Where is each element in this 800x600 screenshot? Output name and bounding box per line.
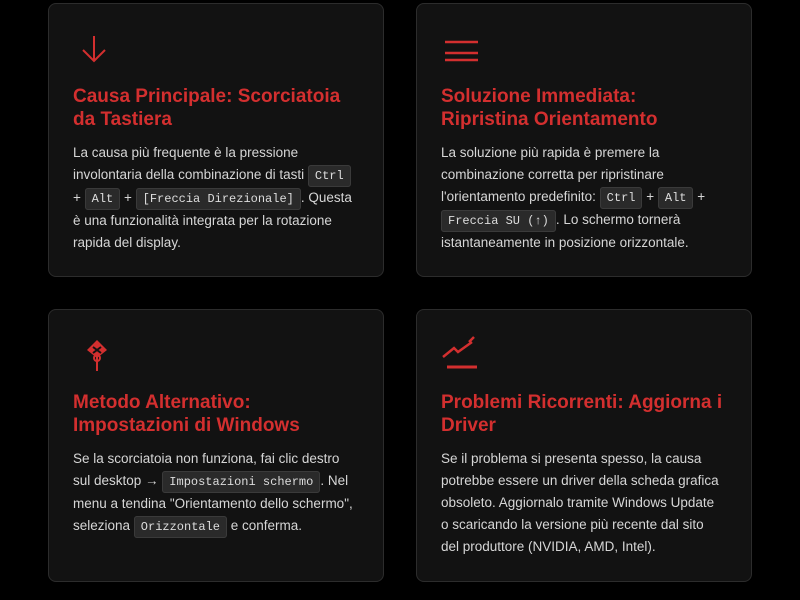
text block: Se la scorciatoia non funziona, fai clic destro sul desktop → Impostazioni schermo . Nel menu a tendina "Orientamento dello schermo", seleziona Orizzontale e conferma. <box>73 451 353 534</box>
text block: La causa più frequente è la pressione involontaria della combinazione di tasti Ctrl + Alt + [Freccia Direzionale] . Questa è una funzionalità integrata per la rotazione rapida del display. <box>73 145 352 250</box>
icon: trend chart <box>442 336 477 368</box>
icon: down arrow <box>82 36 106 62</box>
panel: causa principale <box>48 3 384 277</box>
icon: menu lines <box>445 40 478 62</box>
heading: Problemi Ricorrenti: Aggiorna i Driver <box>441 392 722 436</box>
panel: problemi ricorrenti <box>416 309 752 582</box>
heading: Soluzione Immediata: Ripristina Orientamento <box>441 86 657 130</box>
panel: soluzione immediata <box>416 3 752 277</box>
text block: Se il problema si presenta spesso, la causa potrebbe essere un driver della scheda grafica obsoleto. Aggiornalo tramite Windows Update o scaricando la versione più recente dal sito del produttore (NVIDIA, AMD, Intel). <box>441 451 719 554</box>
heading: Metodo Alternativo: Impostazioni di Windows <box>73 392 300 436</box>
icon: settings diamond <box>87 340 107 371</box>
text block: La soluzione più rapida è premere la combinazione corretta per ripristinare l'orientamento predefinito: Ctrl + Alt + Freccia SU (↑) . Lo schermo tornerà istantaneamente in posizione orizzontale. <box>441 145 705 250</box>
panel: metodo alternativo <box>48 309 384 582</box>
heading: Causa Principale: Scorciatoia da Tastiera <box>73 86 340 130</box>
